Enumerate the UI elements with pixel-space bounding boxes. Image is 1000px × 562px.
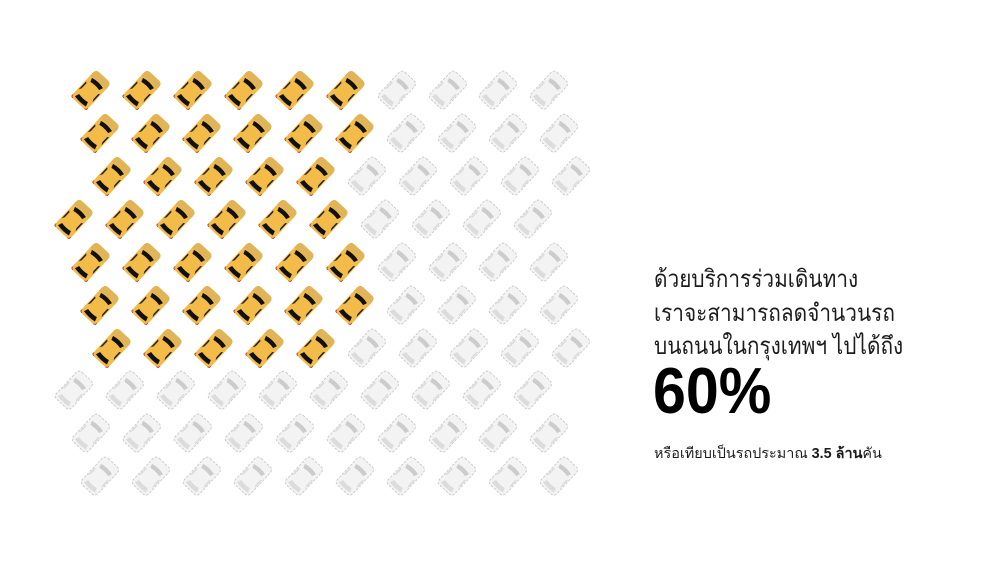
row 4 [54,198,553,240]
headline text: บนถนนในกรุงเทพฯ ไปได้ถึง [654,333,903,360]
row 8 [54,369,553,411]
big number: 60% [653,354,771,427]
headline text [654,266,903,360]
row 10 [80,455,579,497]
row 6 [80,284,579,326]
row 5 [71,241,569,283]
row 3 [92,155,591,197]
row 9 [71,412,569,454]
row 2 [80,112,579,154]
row 7 [92,327,591,369]
row 1 [71,69,569,111]
headline text: เราจะสามารถลดจำนวนรถ [654,300,895,326]
headline text: ด้วยบริการร่วมเดินทาง [654,266,858,293]
sub text: หรือเทียบเป็นรถประมาณ 3.5 ล้านคัน [654,446,882,462]
